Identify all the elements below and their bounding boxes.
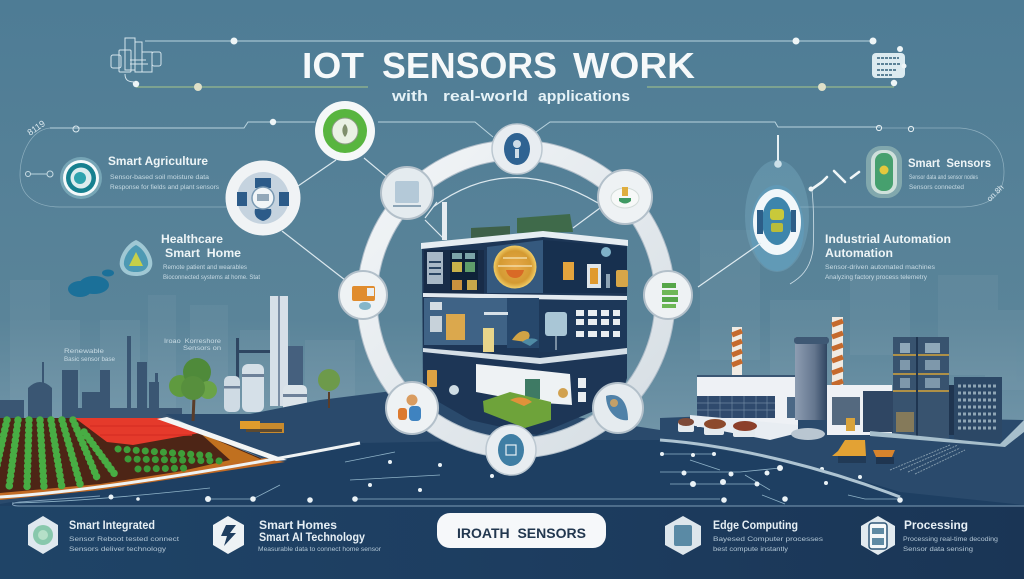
- node: bottom-left: [386, 382, 438, 434]
- faded city skyline: [10, 230, 1024, 420]
- farm field: [0, 417, 360, 500]
- connector to right node: [698, 243, 761, 287]
- label: left scene small text: [64, 338, 221, 363]
- icon: healthcare drop: [120, 240, 152, 276]
- label: left scene small text: Iroao Korreshore: [164, 338, 221, 345]
- trucks right: [832, 440, 965, 474]
- lower ground: [0, 440, 1024, 510]
- title: IOT: [302, 45, 364, 86]
- small tree: [318, 369, 340, 408]
- connector lines: left panel: [20, 118, 880, 207]
- factory: [678, 317, 892, 440]
- left refinery: [224, 296, 307, 417]
- icon: smart sensor: [866, 146, 902, 198]
- text: industrial automation: Automation: [825, 248, 893, 260]
- bottom item: smart homes: [213, 516, 382, 554]
- node: top-left: [381, 167, 433, 219]
- bottom item: edge computing: [665, 516, 824, 555]
- body: [422, 233, 627, 435]
- subtitle: applications: [538, 88, 630, 105]
- text: industrial automation: Sensor-driven automated machines: [825, 264, 936, 271]
- text: industrial automation: Industrial Automation: [825, 234, 951, 246]
- details ground floor: [427, 370, 437, 387]
- road band right: [660, 440, 900, 497]
- bottom item: processing: Sensor data sensing: [903, 546, 973, 553]
- bottom band frame line: [12, 496, 1024, 506]
- label: left scene small text: Sensors on: [183, 345, 221, 352]
- bottom item: processing: Processing: [904, 520, 968, 532]
- text: smart sensors: [908, 158, 991, 191]
- ground network lines and dots: [12, 452, 903, 504]
- node: right: [644, 271, 692, 319]
- text: smart sensors: Sensors connected: [909, 184, 964, 191]
- node: bottom: [486, 425, 536, 475]
- bottom band: [0, 506, 1024, 579]
- header frame lines: [133, 38, 897, 91]
- text: smart agriculture: Sensor-based soil moisture data: [110, 174, 209, 181]
- third floor divider: [423, 348, 627, 364]
- decorative cloud icon: [68, 270, 114, 297]
- text: healthcare smart home: Bioconnected systems at home. Stat: [163, 274, 260, 281]
- icon: line-art city: [111, 38, 161, 82]
- text: smart agriculture: Smart Agriculture: [108, 156, 208, 168]
- text: smart sensors: Sensor data and sensor nodes: [909, 174, 978, 181]
- tree: [169, 358, 217, 421]
- title: [302, 45, 695, 86]
- text: industrial automation: Analyzing factory process telemetry: [825, 274, 928, 281]
- bottom item: smart integrated: Sensors deliver technology: [69, 546, 167, 553]
- subtitle: [391, 88, 630, 105]
- bottom item: processing: Processing real-time decoding: [903, 536, 998, 543]
- right-hand panel outline: on 8h: [985, 183, 1006, 203]
- subtitle: real-world: [443, 88, 528, 105]
- details second floor: [430, 302, 442, 310]
- pill: iroath sensors: IROATH SENSORS: [457, 526, 586, 541]
- bottom item: edge computing: Bayesed Computer processes: [713, 536, 824, 543]
- title: WORK: [573, 45, 695, 86]
- icon: control dial disc: [226, 160, 300, 236]
- bottom item: processing: [861, 516, 998, 555]
- text: healthcare smart home: Smart Home: [165, 248, 241, 260]
- title: SENSORS: [382, 45, 557, 86]
- label: left scene small text: Basic sensor base: [64, 356, 115, 363]
- node: bottom-right: [593, 383, 643, 433]
- rooftop units: [471, 214, 573, 239]
- text: healthcare smart home: Healthcare: [161, 234, 223, 246]
- bottom item: edge computing: Edge Computing: [713, 520, 798, 532]
- top floor panels: [421, 231, 628, 249]
- text: healthcare smart home: [161, 234, 260, 281]
- building: [421, 202, 628, 435]
- node: top: [492, 124, 542, 174]
- text: smart agriculture: [108, 156, 220, 191]
- icon: green sensor disc: [315, 101, 375, 161]
- bottom item: edge computing: best compute instantly: [713, 546, 789, 553]
- icon: smart agriculture: [60, 157, 102, 199]
- bottom item: smart homes: Measurable data to connect home sensor: [258, 546, 382, 553]
- trend line: [790, 171, 859, 284]
- icon: central wearable sensor: [745, 135, 809, 272]
- bottom item: smart homes: Smart Homes: [259, 520, 337, 532]
- dark ground plane: [0, 390, 1024, 510]
- node: left: [339, 271, 387, 319]
- text: healthcare smart home: Remote patient and wearables: [163, 264, 248, 271]
- bottom item: smart integrated: [28, 516, 179, 554]
- text: smart agriculture: Response for fields and plant sensors: [110, 184, 220, 191]
- connector lines: left panel: 8119: [25, 118, 47, 138]
- second floor panels: [423, 293, 627, 301]
- bottom item: smart integrated: Smart Integrated: [69, 520, 155, 532]
- pill: iroath sensors: [437, 513, 606, 548]
- label: left scene small text: Renewable: [64, 348, 104, 355]
- bottom item: smart integrated: Sensor Reboot tested connect: [69, 536, 179, 543]
- bottom item: smart homes: Smart AI Technology: [259, 532, 366, 544]
- truck left: [240, 421, 284, 433]
- node: top-right: [598, 170, 652, 224]
- text: smart sensors: Smart Sensors: [908, 158, 991, 170]
- details top floor: [427, 252, 443, 284]
- subtitle: with: [391, 88, 428, 105]
- icon: data chip: [872, 46, 906, 78]
- connectors to discs: [282, 158, 388, 280]
- right-hand panel outline: [800, 125, 1006, 207]
- antenna: [442, 202, 447, 240]
- text: industrial automation: [825, 234, 951, 281]
- ring: [367, 150, 665, 448]
- container towers: [863, 337, 1024, 447]
- left factory silhouette: [0, 336, 182, 420]
- inner arc lines: [425, 178, 600, 238]
